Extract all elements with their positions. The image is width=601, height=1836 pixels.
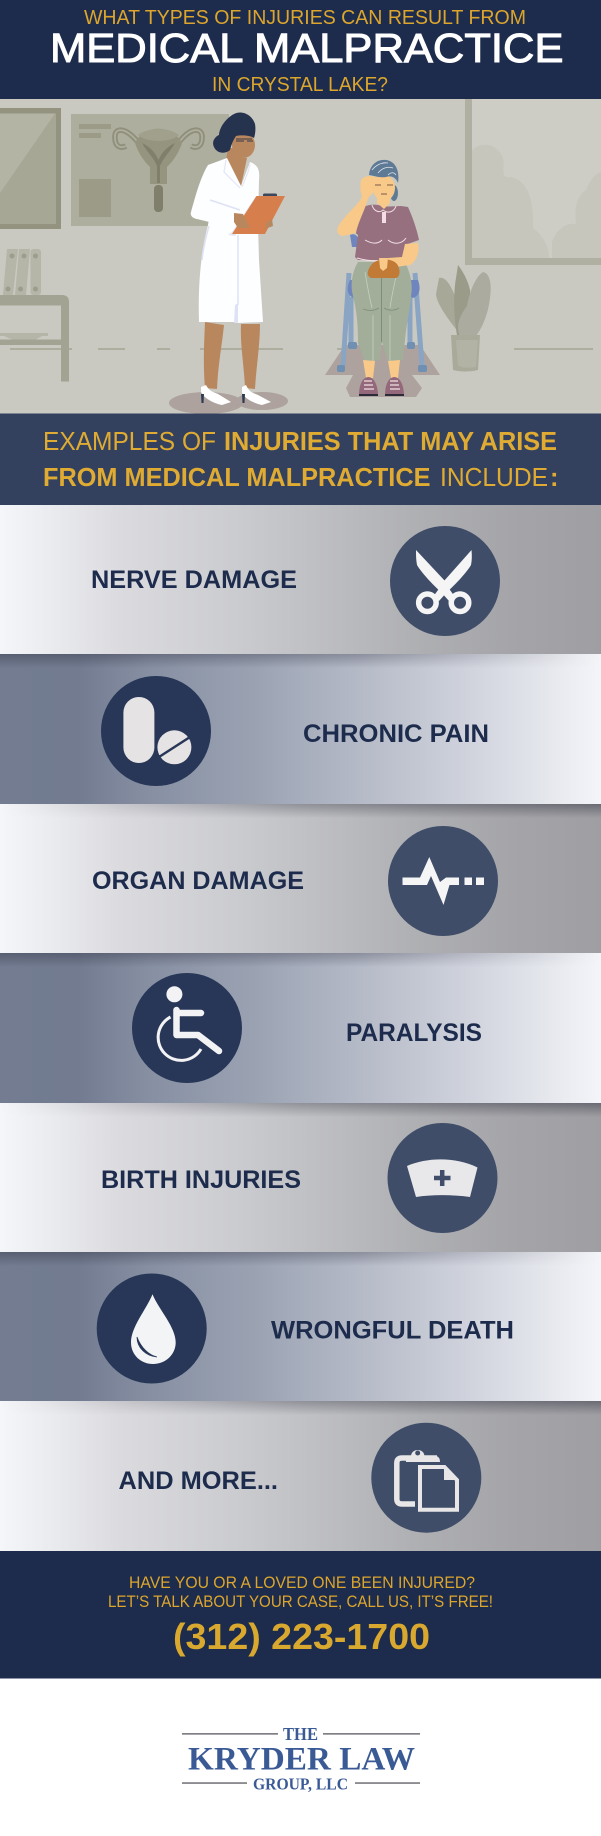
icon: wheelchair bbox=[132, 973, 242, 1083]
label: CHRONIC PAIN bbox=[303, 720, 489, 748]
shelf bbox=[0, 295, 69, 382]
chair bbox=[337, 234, 427, 372]
phone number: (312) 223-1700 bbox=[173, 1616, 430, 1657]
label: BIRTH INJURIES bbox=[101, 1166, 301, 1194]
header line 3: IN CRYSTAL LAKE? bbox=[212, 73, 388, 96]
section heading band bbox=[0, 414, 601, 506]
header banner bbox=[0, 0, 601, 100]
title: MEDICAL MALPRACTICE bbox=[50, 25, 564, 71]
icon: pills bbox=[101, 676, 211, 786]
potted plant bbox=[436, 265, 491, 372]
row: and more bbox=[0, 1401, 601, 1551]
icon: scissors bbox=[390, 526, 500, 636]
hair back bbox=[390, 185, 398, 201]
legs bbox=[204, 322, 260, 389]
window with bushes bbox=[465, 99, 601, 265]
row: organ damage bbox=[0, 804, 601, 953]
shoes bbox=[359, 377, 404, 396]
raised arm bbox=[337, 176, 378, 236]
anatomical poster bbox=[71, 114, 229, 226]
uterus diagram bbox=[115, 129, 202, 212]
right arm bbox=[388, 243, 419, 268]
lab coat bbox=[191, 158, 263, 323]
heading line 1: EXAMPLES OF bbox=[43, 428, 216, 456]
patient's rug shadow bbox=[325, 345, 440, 397]
icon: drop bbox=[97, 1274, 207, 1384]
icon: nurse cap bbox=[388, 1123, 498, 1233]
label: ORGAN DAMAGE bbox=[92, 867, 304, 895]
row: nerve damage bbox=[0, 505, 601, 654]
row: birth injuries bbox=[0, 1103, 601, 1252]
illustration panel: doctor and patient in exam room bbox=[0, 99, 601, 414]
purse bbox=[368, 260, 400, 278]
label: WRONGFUL DEATH bbox=[271, 1317, 514, 1345]
patient on chair bbox=[337, 160, 427, 396]
row: paralysis bbox=[0, 953, 601, 1103]
doctor's rug shadow bbox=[169, 392, 288, 414]
footer text line 2: LET’S TALK ABOUT YOUR CASE, CALL US, IT’S FREE! bbox=[108, 1592, 493, 1611]
framed picture bbox=[0, 108, 61, 229]
floor dashes bbox=[10, 348, 593, 350]
hair bbox=[369, 160, 398, 183]
shoes bbox=[201, 385, 271, 405]
hair bbox=[213, 112, 255, 153]
header line 1: WHAT TYPES OF INJURIES CAN RESULT FROM bbox=[84, 6, 526, 29]
icon: clipboards bbox=[371, 1423, 481, 1533]
heading line 1 bbox=[43, 428, 557, 456]
ankles bbox=[363, 360, 400, 378]
logo: The Kryder Law Group bbox=[182, 1724, 420, 1793]
neck bbox=[377, 193, 390, 209]
shirt bbox=[352, 205, 419, 260]
footer call to action bbox=[0, 1551, 601, 1678]
clipboard bbox=[228, 196, 260, 236]
binders bbox=[3, 249, 41, 295]
label: AND MORE... bbox=[118, 1467, 278, 1495]
row: chronic pain bbox=[0, 654, 601, 804]
heading line 2: INCLUDE bbox=[440, 464, 548, 492]
neck and face bbox=[226, 148, 247, 186]
label: NERVE DAMAGE bbox=[91, 566, 297, 594]
heading line 2: : bbox=[550, 464, 558, 492]
footer text line 1: HAVE YOU OR A LOVED ONE BEEN INJURED? bbox=[129, 1573, 475, 1592]
doctor bbox=[191, 112, 285, 405]
row: wrongful death bbox=[0, 1252, 601, 1401]
heading line 2: FROM MEDICAL MALPRACTICE bbox=[43, 464, 430, 492]
icon: pulse bbox=[388, 826, 498, 936]
logo name: KRYDER LAW bbox=[188, 1741, 415, 1777]
pants bbox=[352, 262, 412, 362]
face bbox=[373, 175, 395, 201]
logo word: the: THE bbox=[283, 1724, 318, 1744]
heading line 1: INJURIES THAT MAY ARISE bbox=[224, 428, 557, 456]
logo word: group: GROUP, LLC bbox=[253, 1774, 348, 1793]
hands bbox=[234, 213, 273, 229]
label: PARALYSIS bbox=[346, 1019, 482, 1047]
